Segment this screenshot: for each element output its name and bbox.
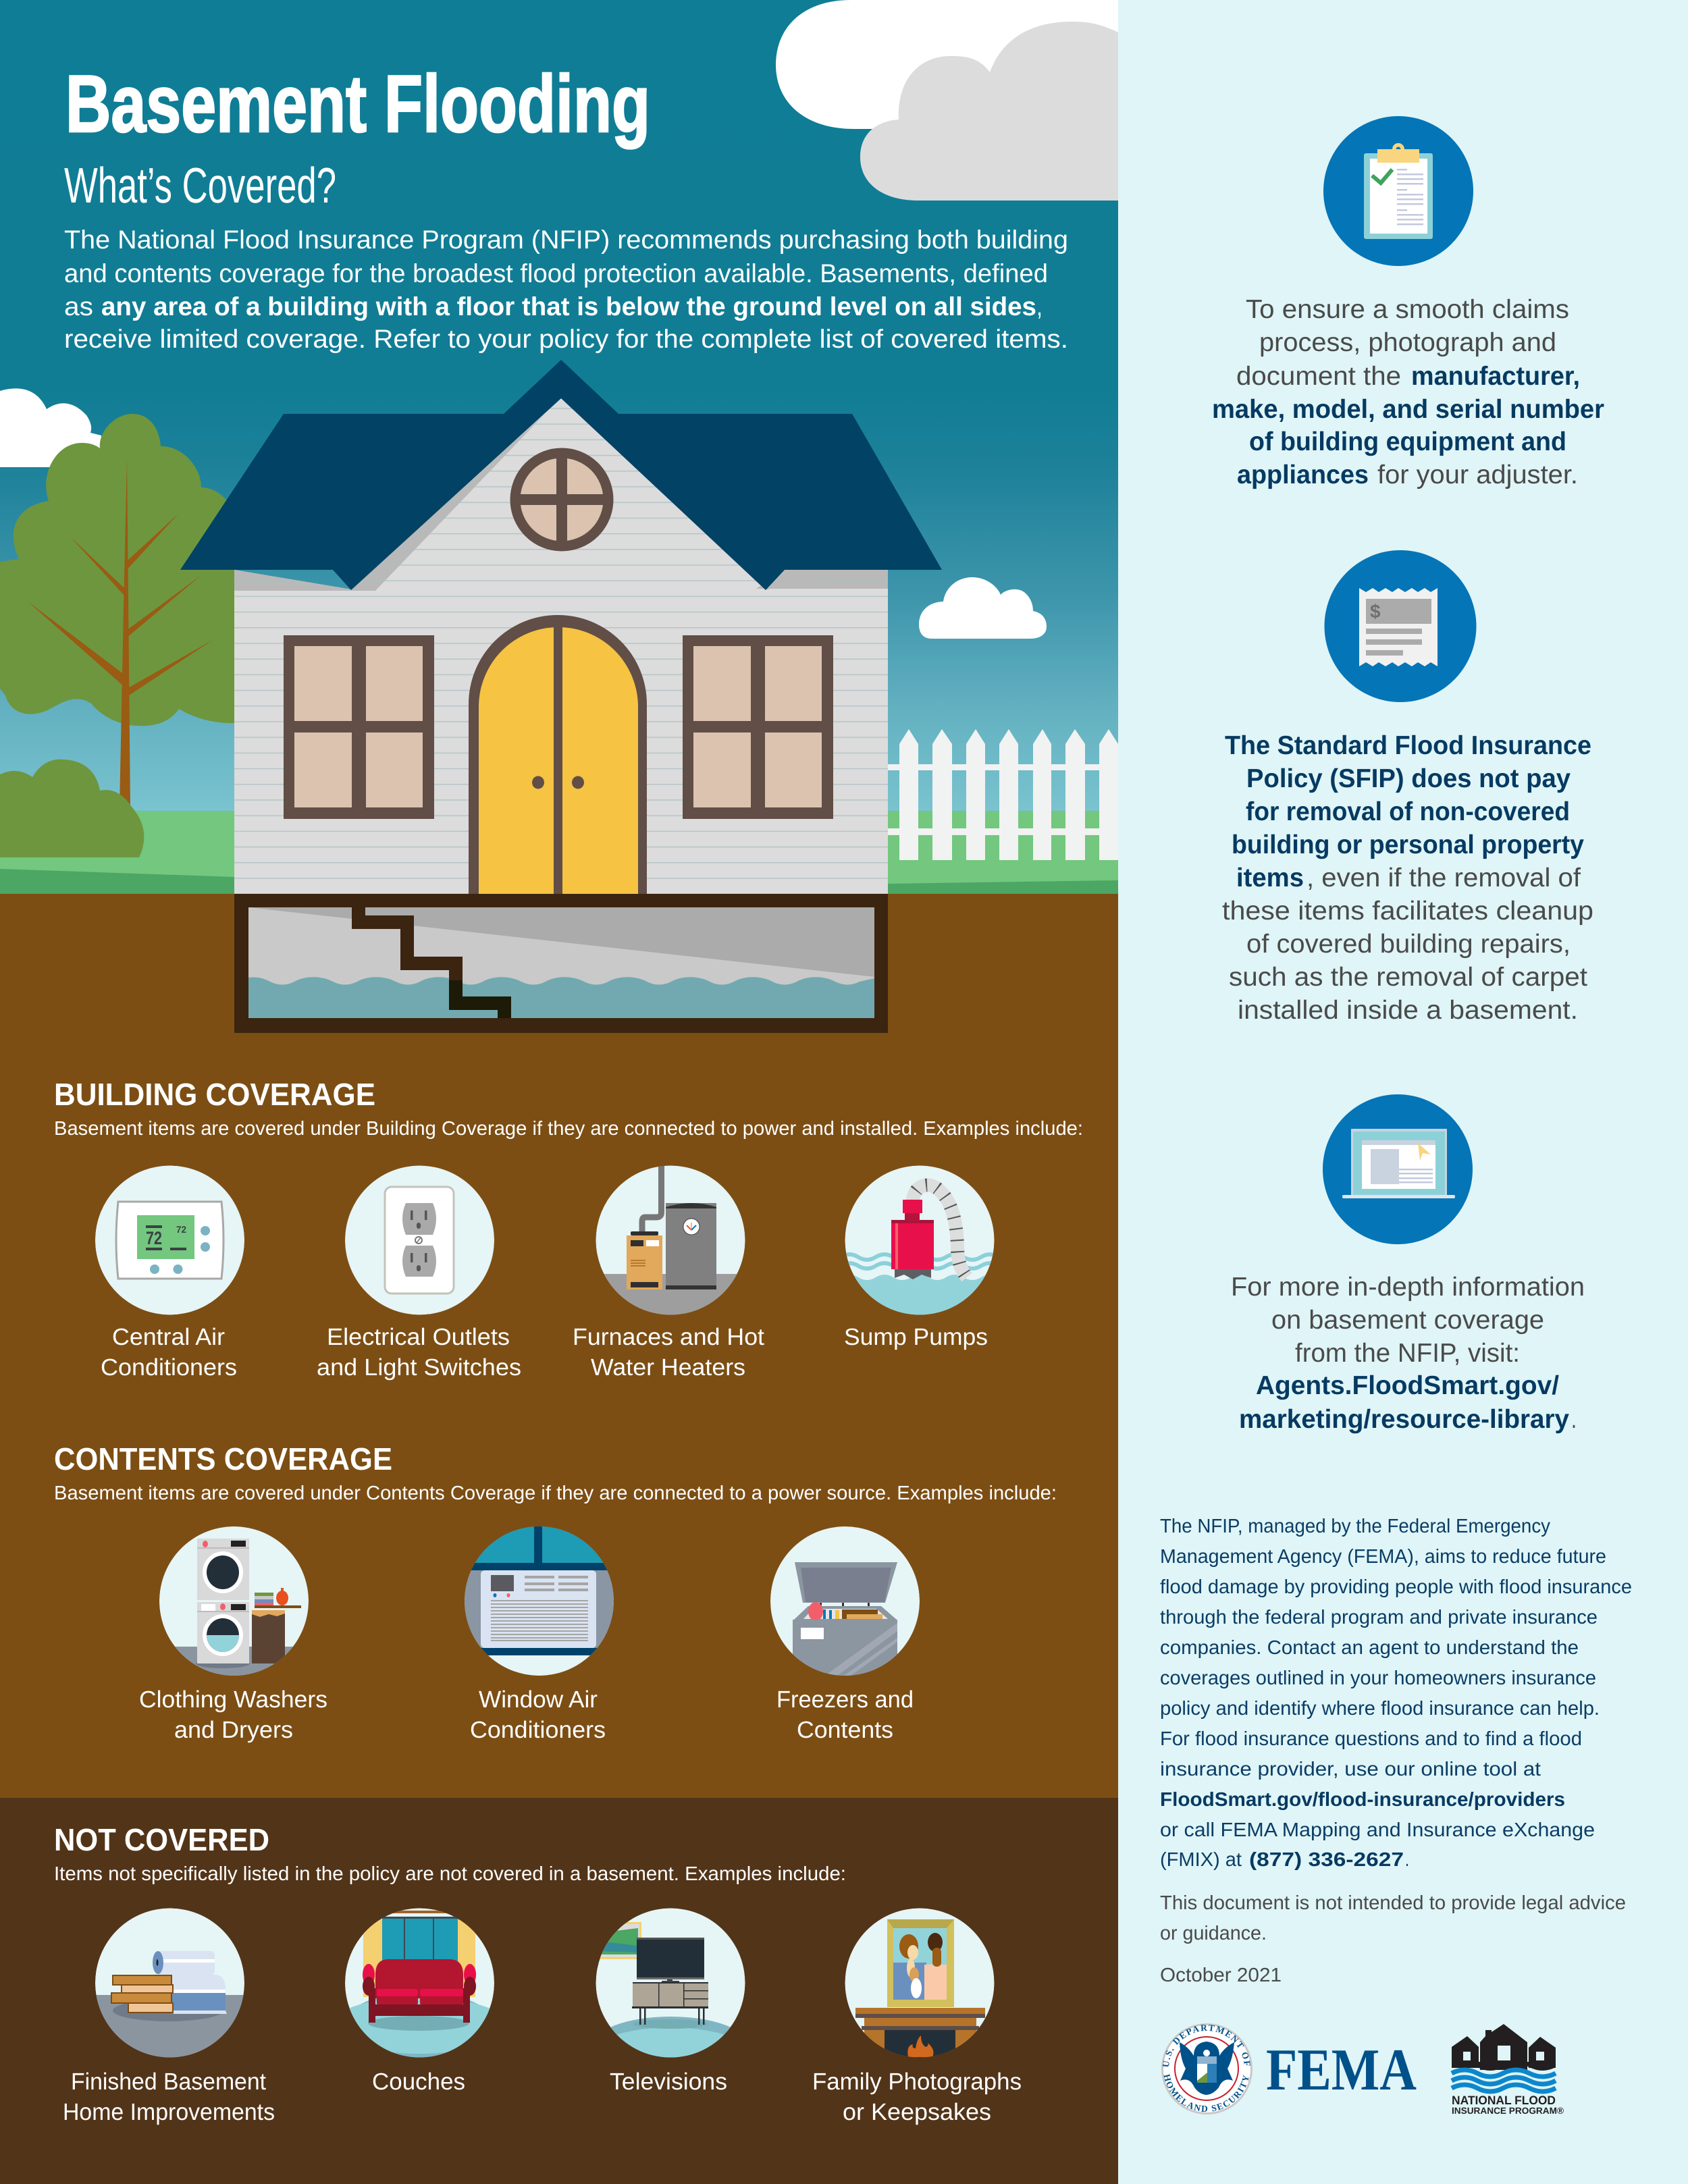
title: Basement Flooding xyxy=(65,59,650,149)
item labels: not covered: Couches xyxy=(372,2069,465,2095)
intro text: receive limited coverage. Refer to your policy for the complete list of covered items. xyxy=(64,325,1068,354)
icon: television xyxy=(596,1908,745,2058)
item labels: not covered: Home Improvements xyxy=(63,2099,275,2125)
door xyxy=(469,615,647,894)
text block: about NFIP: FloodSmart.gov/flood-insurance/providers xyxy=(1160,1789,1565,1811)
text block: SFIP removal xyxy=(1222,731,1593,1025)
item labels: not covered: Finished Basement xyxy=(71,2069,266,2095)
cloud: left white xyxy=(0,388,101,467)
item labels: building coverage: Electrical Outlets xyxy=(327,1324,510,1350)
text block: about NFIP: The NFIP, managed by the Federal Emergency xyxy=(1160,1516,1550,1537)
logo: National Flood Insurance Program: INSURANCE PROGRAM® xyxy=(1452,2106,1564,2116)
text block: about NFIP: policy and identify where flood insurance can help. xyxy=(1160,1698,1600,1720)
text block: about NFIP: companies. Contact an agent to understand the xyxy=(1160,1637,1579,1659)
subtitle: What’s Covered? xyxy=(64,157,336,213)
logo: DHS seal: U.S. DEPARTMENT OF xyxy=(1163,2025,1250,2067)
sky background xyxy=(0,0,1118,894)
item labels: contents coverage: Window Air xyxy=(479,1686,598,1713)
not covered background xyxy=(0,1798,1118,2184)
icon: window air conditioner xyxy=(465,1526,614,1676)
logo: National Flood Insurance Program: NATIONAL FLOOD xyxy=(1452,2094,1556,2107)
basement cross-section xyxy=(234,894,888,1033)
item labels: building coverage: Water Heaters xyxy=(591,1354,745,1381)
section: contents coverage xyxy=(54,1441,1057,1743)
text block: more information: marketing/resource-library xyxy=(1239,1405,1569,1434)
text block: more information: . xyxy=(1571,1405,1577,1434)
cloud: right small xyxy=(919,577,1047,639)
text block: documentation: for your adjuster. xyxy=(1377,460,1578,489)
intro text: The National Flood Insurance Program (NFIP) recommends purchasing both building xyxy=(64,225,1068,255)
icon: central air thermostat: 72 xyxy=(176,1224,186,1235)
basement stairs xyxy=(359,895,504,1018)
text block: about NFIP: For flood insurance questions and to find a flood xyxy=(1160,1728,1582,1750)
house xyxy=(180,360,942,894)
icon: laptop xyxy=(1323,1094,1473,1244)
item labels: contents coverage: and Dryers xyxy=(174,1717,293,1743)
logo: DHS seal: HOMELAND SECURITY xyxy=(1164,2074,1249,2112)
item labels: not covered: Family Photographs xyxy=(812,2069,1022,2095)
text block: about NFIP: or call FEMA Mapping and Insurance eXchange xyxy=(1160,1819,1595,1841)
logo: National Flood Insurance Program xyxy=(1452,2024,1564,2116)
item labels: building coverage: Conditioners xyxy=(101,1354,237,1381)
icon: furnace and water heater xyxy=(594,1165,747,1316)
icon: receipt: $ xyxy=(1370,601,1381,622)
intro text: and contents coverage for the broadest flood protection available. Basements, defined xyxy=(64,259,1048,288)
text block: SFIP removal: such as the removal of carpet xyxy=(1229,963,1587,992)
icon: clipboard xyxy=(1323,116,1473,266)
text block: SFIP removal: building or personal property xyxy=(1232,830,1584,859)
description: not covered: Items not specifically listed in the policy are not covered in a basement. Examples include: xyxy=(54,1863,846,1885)
item labels: building coverage: and Light Switches xyxy=(317,1354,521,1381)
text block: disclaimer: or guidance. xyxy=(1160,1923,1267,1944)
heading: not covered: NOT COVERED xyxy=(54,1822,269,1857)
text block: documentation: process, photograph and xyxy=(1259,328,1556,357)
text block: disclaimer xyxy=(1160,1892,1626,1944)
text block: more information: Agents.FloodSmart.gov/ xyxy=(1256,1371,1559,1400)
text block: documentation: make, model, and serial number xyxy=(1212,395,1604,424)
icon: family photographs xyxy=(845,1908,994,2060)
tree xyxy=(0,414,234,807)
text block: documentation: of building equipment and xyxy=(1249,427,1566,456)
intro text: , xyxy=(1036,292,1043,321)
text block: documentation: To ensure a smooth claims xyxy=(1246,295,1569,324)
section: building coverage xyxy=(54,1077,1083,1381)
item labels: building coverage: Furnaces and Hot xyxy=(573,1324,764,1350)
text block: SFIP removal: Policy (SFIP) does not pay xyxy=(1246,764,1571,793)
text block: about NFIP: through the federal program and private insurance xyxy=(1160,1607,1598,1628)
icon: finished basement improvements xyxy=(95,1908,246,2059)
item labels: contents coverage xyxy=(139,1686,914,1743)
cloud: top right white xyxy=(776,0,1118,129)
text block: documentation: document the xyxy=(1236,362,1401,391)
text block: more information xyxy=(1231,1273,1585,1434)
intro text: any area of a building with a floor that is below the ground level on all sides xyxy=(101,292,1036,321)
logo: FEMA wordmark: FEMA xyxy=(1266,2037,1417,2103)
text block: about NFIP: flood damage by providing people with flood insurance xyxy=(1160,1576,1632,1598)
text block: more information: on basement coverage xyxy=(1271,1306,1544,1335)
icon: central air thermostat: 72 xyxy=(146,1228,162,1248)
text block: documentation: manufacturer, xyxy=(1411,362,1580,391)
left window xyxy=(284,635,434,819)
roof shadows xyxy=(234,413,888,591)
description: building coverage: Basement items are covered under Building Coverage if they are connected to power and installed. Examples include: xyxy=(54,1118,1083,1140)
icon: receipt xyxy=(1325,550,1476,702)
icon: sump pump xyxy=(845,1165,994,1315)
icon: central air thermostat xyxy=(95,1165,244,1315)
siding lines xyxy=(234,398,888,894)
roof xyxy=(180,360,942,590)
text block: SFIP removal: items xyxy=(1236,863,1304,893)
item labels: not covered: Televisions xyxy=(610,2069,727,2095)
text block: documentation: appliances xyxy=(1237,460,1369,489)
date: October 2021 xyxy=(1160,1965,1282,1986)
text block: about NFIP: Management Agency (FEMA), aims to reduce future xyxy=(1160,1546,1606,1568)
item labels: contents coverage: Clothing Washers xyxy=(139,1686,327,1713)
intro text xyxy=(64,225,1068,354)
ground grass xyxy=(0,811,1118,894)
fence xyxy=(888,729,1118,860)
item labels: building coverage: Central Air xyxy=(112,1324,225,1350)
text block: about NFIP: insurance provider, use our online tool at xyxy=(1160,1759,1541,1780)
intro text: as xyxy=(64,292,93,321)
icon: freezer xyxy=(770,1526,920,1680)
soil: coverage background xyxy=(0,894,1118,1799)
round attic window xyxy=(510,448,613,551)
text block: more information: from the NFIP, visit: xyxy=(1295,1339,1520,1368)
heading: contents coverage: CONTENTS COVERAGE xyxy=(54,1441,392,1476)
text block: SFIP removal: installed inside a basement. xyxy=(1238,996,1578,1025)
bush xyxy=(0,760,144,857)
panel: sidebar background xyxy=(1118,0,1688,2184)
text block: about NFIP xyxy=(1160,1516,1632,1871)
text block: SFIP removal: for removal of non-covered xyxy=(1246,797,1570,826)
logo: DHS seal xyxy=(1161,2023,1252,2114)
item labels: building coverage xyxy=(101,1324,988,1381)
text block: more information: For more in-depth information xyxy=(1231,1273,1585,1302)
text block: SFIP removal: The Standard Flood Insurance xyxy=(1225,731,1591,760)
text block: about NFIP: (FMIX) at xyxy=(1160,1849,1242,1871)
icon: electrical outlet xyxy=(345,1165,494,1315)
text block: about NFIP: . xyxy=(1405,1849,1409,1871)
text block: about NFIP: (877) 336-2627 xyxy=(1249,1849,1404,1871)
text block: documentation xyxy=(1212,295,1604,489)
item labels: contents coverage: Contents xyxy=(797,1717,893,1743)
icon: couch xyxy=(345,1908,494,2058)
section: not covered xyxy=(54,1822,1022,2125)
flood water xyxy=(248,977,874,1018)
item labels: contents coverage: Conditioners xyxy=(470,1717,606,1743)
item labels: building coverage: Sump Pumps xyxy=(844,1324,988,1350)
text block: SFIP removal: these items facilitates cleanup xyxy=(1222,897,1593,926)
item labels: not covered: or Keepsakes xyxy=(843,2099,991,2125)
item labels: contents coverage: Freezers and xyxy=(776,1686,914,1713)
cloud: top right gray xyxy=(860,22,1118,201)
description: contents coverage: Basement items are covered under Contents Coverage if they are connected to a power source. Examples include: xyxy=(54,1483,1057,1504)
text block: disclaimer: This document is not intended to provide legal advice xyxy=(1160,1892,1626,1914)
right window xyxy=(683,635,833,819)
text block: SFIP removal: of covered building repairs, xyxy=(1246,930,1571,959)
heading: building coverage: BUILDING COVERAGE xyxy=(54,1077,375,1112)
text block: SFIP removal: , even if the removal of xyxy=(1307,863,1581,893)
item labels: not covered xyxy=(63,2069,1022,2125)
house wall xyxy=(234,398,888,894)
icon: washer and dryer xyxy=(155,1526,317,1677)
text block: about NFIP: coverages outlined in your homeowners insurance xyxy=(1160,1668,1596,1689)
